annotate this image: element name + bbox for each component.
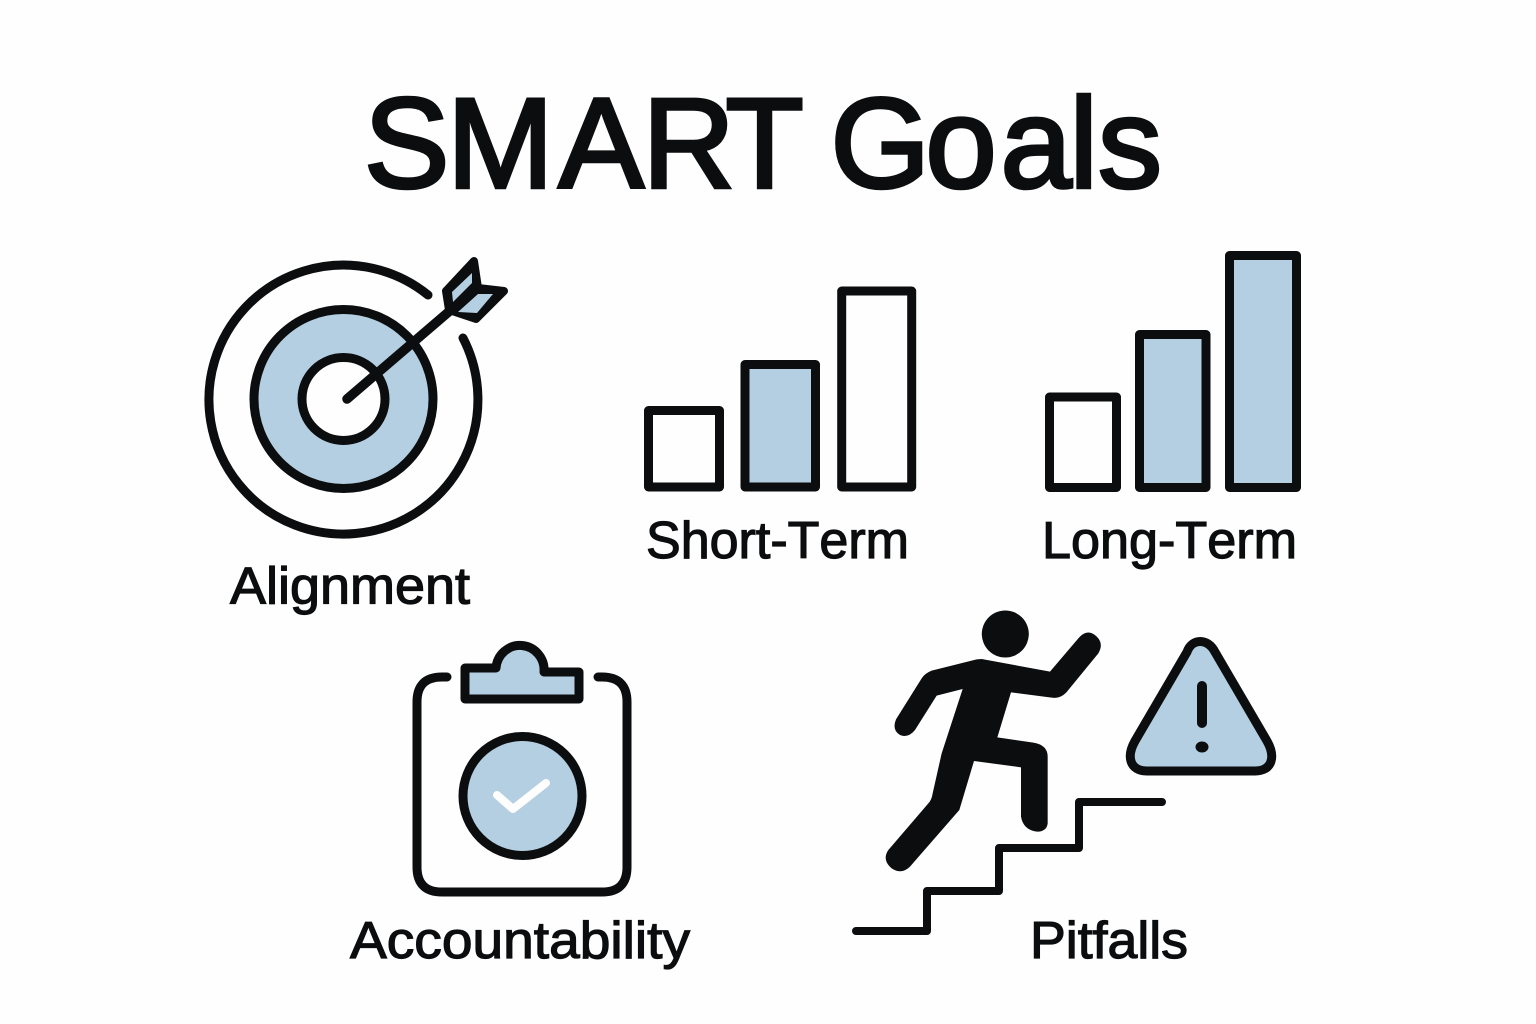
label: Short-Term: Short-Term bbox=[646, 512, 909, 570]
title: SMART Goals bbox=[364, 72, 1162, 216]
label: Long-Term: Long-Term bbox=[1042, 512, 1297, 570]
label: Alignment: Alignment bbox=[230, 558, 471, 616]
chart: long-term bars bbox=[1050, 256, 1296, 488]
icon: clipboard with check bbox=[417, 645, 627, 892]
label: Accountability: Accountability bbox=[350, 912, 690, 970]
chart: short-term bars bbox=[648, 291, 912, 487]
label: Pitfalls: Pitfalls bbox=[1030, 912, 1188, 970]
icon: person climbing stairs bbox=[856, 610, 1162, 931]
icon: warning triangle bbox=[1130, 642, 1272, 771]
icon: target with arrow bbox=[209, 261, 504, 534]
